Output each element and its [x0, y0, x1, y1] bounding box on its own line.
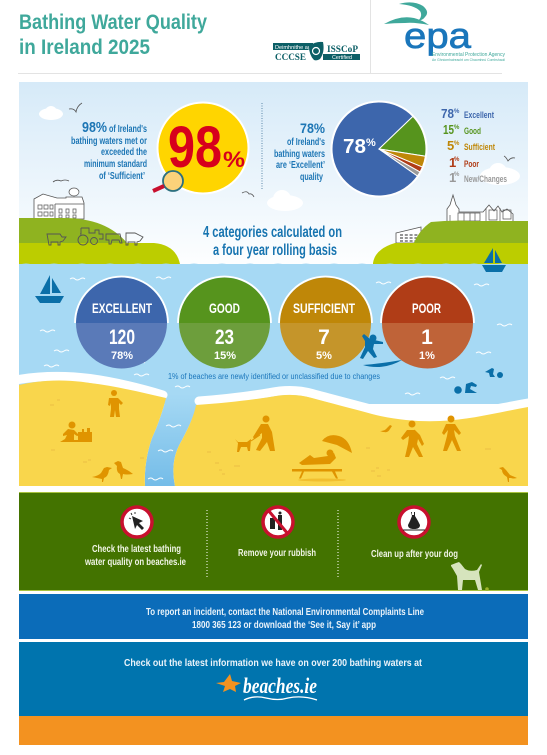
certification badge: Deimhnithe ag	[275, 45, 311, 51]
walker one	[401, 420, 424, 457]
text: 98 percent statement	[72, 122, 147, 179]
certification badge: ISSCoP	[327, 44, 359, 54]
seagulls left	[92, 467, 112, 482]
legend: Poor	[464, 159, 479, 169]
panel: report incident: To report an incident, contact the National Environmental Complaints Line	[146, 606, 424, 618]
circle: good	[178, 276, 271, 369]
panel: report incident	[19, 594, 528, 639]
boat left	[35, 275, 64, 303]
legend: 78	[441, 106, 454, 121]
circle: good: GOOD	[209, 301, 240, 316]
EPA logo: An Ghníomhaireacht um Chaomhnú Comhshaoil	[432, 58, 505, 62]
pie chart: 78	[343, 136, 366, 158]
sunbather with umbrella	[292, 435, 352, 482]
icon: check website	[122, 507, 152, 537]
legend: %	[454, 157, 460, 163]
sky	[19, 82, 528, 236]
text: check quality: water quality on beaches.ie	[84, 556, 186, 568]
pie chart	[331, 101, 427, 197]
text: check quality: Check the latest bathing	[92, 543, 181, 555]
circle: poor: 1	[421, 326, 433, 349]
legend: New/Changes	[464, 174, 507, 184]
text: 78 percent statement: quality	[300, 172, 323, 183]
header	[18, 0, 505, 74]
certification badge: CCCSE	[275, 52, 306, 62]
seagull small	[380, 425, 392, 432]
text: 98 percent statement: minimum standard	[84, 159, 147, 170]
logo wave	[244, 697, 317, 700]
icon: dog	[451, 562, 489, 591]
sand marks	[50, 400, 491, 476]
clouds	[39, 106, 520, 211]
circle: poor: POOR	[412, 301, 441, 316]
legend: %	[454, 172, 460, 178]
title	[19, 11, 207, 59]
category circles	[75, 276, 474, 369]
heading: 4 categories: a four year rolling basis	[213, 242, 337, 259]
divider	[261, 103, 263, 190]
panel: beaches.ie: Check out the latest information we have on over 200 bathing waters at	[124, 657, 422, 669]
child with sandcastle	[60, 422, 92, 442]
legend: Sufficient	[464, 142, 495, 152]
text: 78 percent statement: bathing waters	[274, 149, 325, 160]
circle: good: 15%	[214, 350, 236, 362]
circle: excellent: 78%	[111, 350, 133, 362]
beach right	[173, 390, 540, 486]
legend: 1	[449, 155, 456, 170]
left buildings	[34, 188, 84, 219]
footnote: 1% of beaches are newly identified or unclassified due to changes	[168, 372, 380, 381]
text: remove rubbish: Remove your rubbish	[238, 547, 316, 559]
walker two	[442, 416, 461, 451]
text: 78 percent statement: of Ireland's	[287, 137, 325, 148]
legend: 15	[443, 122, 454, 137]
right hills	[373, 221, 528, 264]
text: 78 percent statement: are ‘Excellent’	[276, 160, 325, 171]
icon: starfish	[216, 674, 241, 692]
gauge: 98 percent circle: %	[223, 147, 245, 172]
circle: excellent: EXCELLENT	[92, 301, 153, 316]
legend: 1	[449, 170, 456, 185]
gauge: 98 percent circle: 98	[168, 115, 222, 180]
wave crest	[22, 264, 506, 265]
title: Bathing Water Quality	[19, 11, 207, 34]
EPA logo	[384, 2, 505, 62]
sea	[19, 264, 528, 404]
birds	[53, 103, 515, 197]
text: clean up: Clean up after your dog	[371, 548, 458, 560]
swimmer two	[485, 368, 503, 378]
text: 98 percent statement: bathing waters met or	[71, 136, 147, 147]
text: check quality	[84, 543, 186, 568]
river ripples	[148, 386, 190, 480]
text: 78 percent statement	[274, 120, 325, 183]
right buildings	[396, 195, 513, 243]
legend: %	[454, 141, 460, 147]
left hills	[19, 218, 180, 264]
title: in Ireland 2025	[19, 36, 150, 59]
seagull right	[499, 467, 517, 482]
legend: %	[454, 109, 460, 115]
circle: poor	[381, 276, 474, 369]
legend: Good	[464, 126, 481, 136]
panel: actions	[19, 492, 528, 591]
heading: 4 categories	[203, 224, 342, 259]
text: 98 percent statement: of ‘Sufficient’	[99, 171, 145, 182]
icon: magnifying glass	[153, 171, 183, 191]
text: 98 percent statement: of Ireland's	[109, 124, 147, 135]
circle: excellent	[75, 277, 168, 369]
heading: 4 categories: 4 categories calculated on	[203, 224, 342, 241]
beach figures	[60, 390, 517, 482]
logo text: beaches.ie	[243, 673, 317, 698]
circle: sufficient: 5%	[316, 350, 332, 362]
person walking with dog	[235, 416, 275, 452]
certification badge	[273, 42, 360, 62]
river	[144, 404, 197, 486]
small water ripples	[40, 277, 512, 395]
certification badge: Certified	[332, 55, 352, 61]
circle: poor: 1%	[419, 350, 435, 362]
legend: Excellent	[464, 110, 494, 120]
circle: good: 23	[215, 326, 234, 349]
swimmer one	[454, 382, 477, 394]
text: 78 percent statement: 78%	[300, 120, 325, 136]
legend: 5	[447, 138, 454, 153]
person standing	[108, 390, 123, 417]
legend	[441, 106, 507, 185]
gauge: 98 percent circle	[153, 102, 248, 194]
panel: beaches.ie	[19, 642, 528, 716]
circle: sufficient	[279, 276, 372, 369]
circle: excellent: 120	[109, 326, 135, 349]
beach left	[10, 376, 166, 486]
panel: scene	[10, 82, 540, 486]
EPA logo: Environmental Protection Agency	[432, 52, 505, 58]
circle: sufficient: SUFFICIENT	[293, 301, 356, 316]
text: 98 percent statement: 98%	[82, 119, 107, 136]
text: 98 percent statement: exceeded the	[101, 147, 147, 158]
surfer	[360, 334, 402, 367]
icon: dog fouling	[399, 507, 429, 537]
farm animals and tractor	[47, 228, 143, 245]
pie chart: %	[366, 137, 376, 149]
legend: %	[454, 125, 460, 131]
footer band	[19, 716, 528, 745]
EPA logo: epa	[404, 15, 472, 56]
panel: report incident: 1800 365 123 or download the ‘See it, Say it’ app	[192, 619, 376, 631]
circle: sufficient: 7	[318, 326, 330, 349]
icon: no littering	[263, 507, 293, 537]
boat right	[482, 248, 506, 272]
